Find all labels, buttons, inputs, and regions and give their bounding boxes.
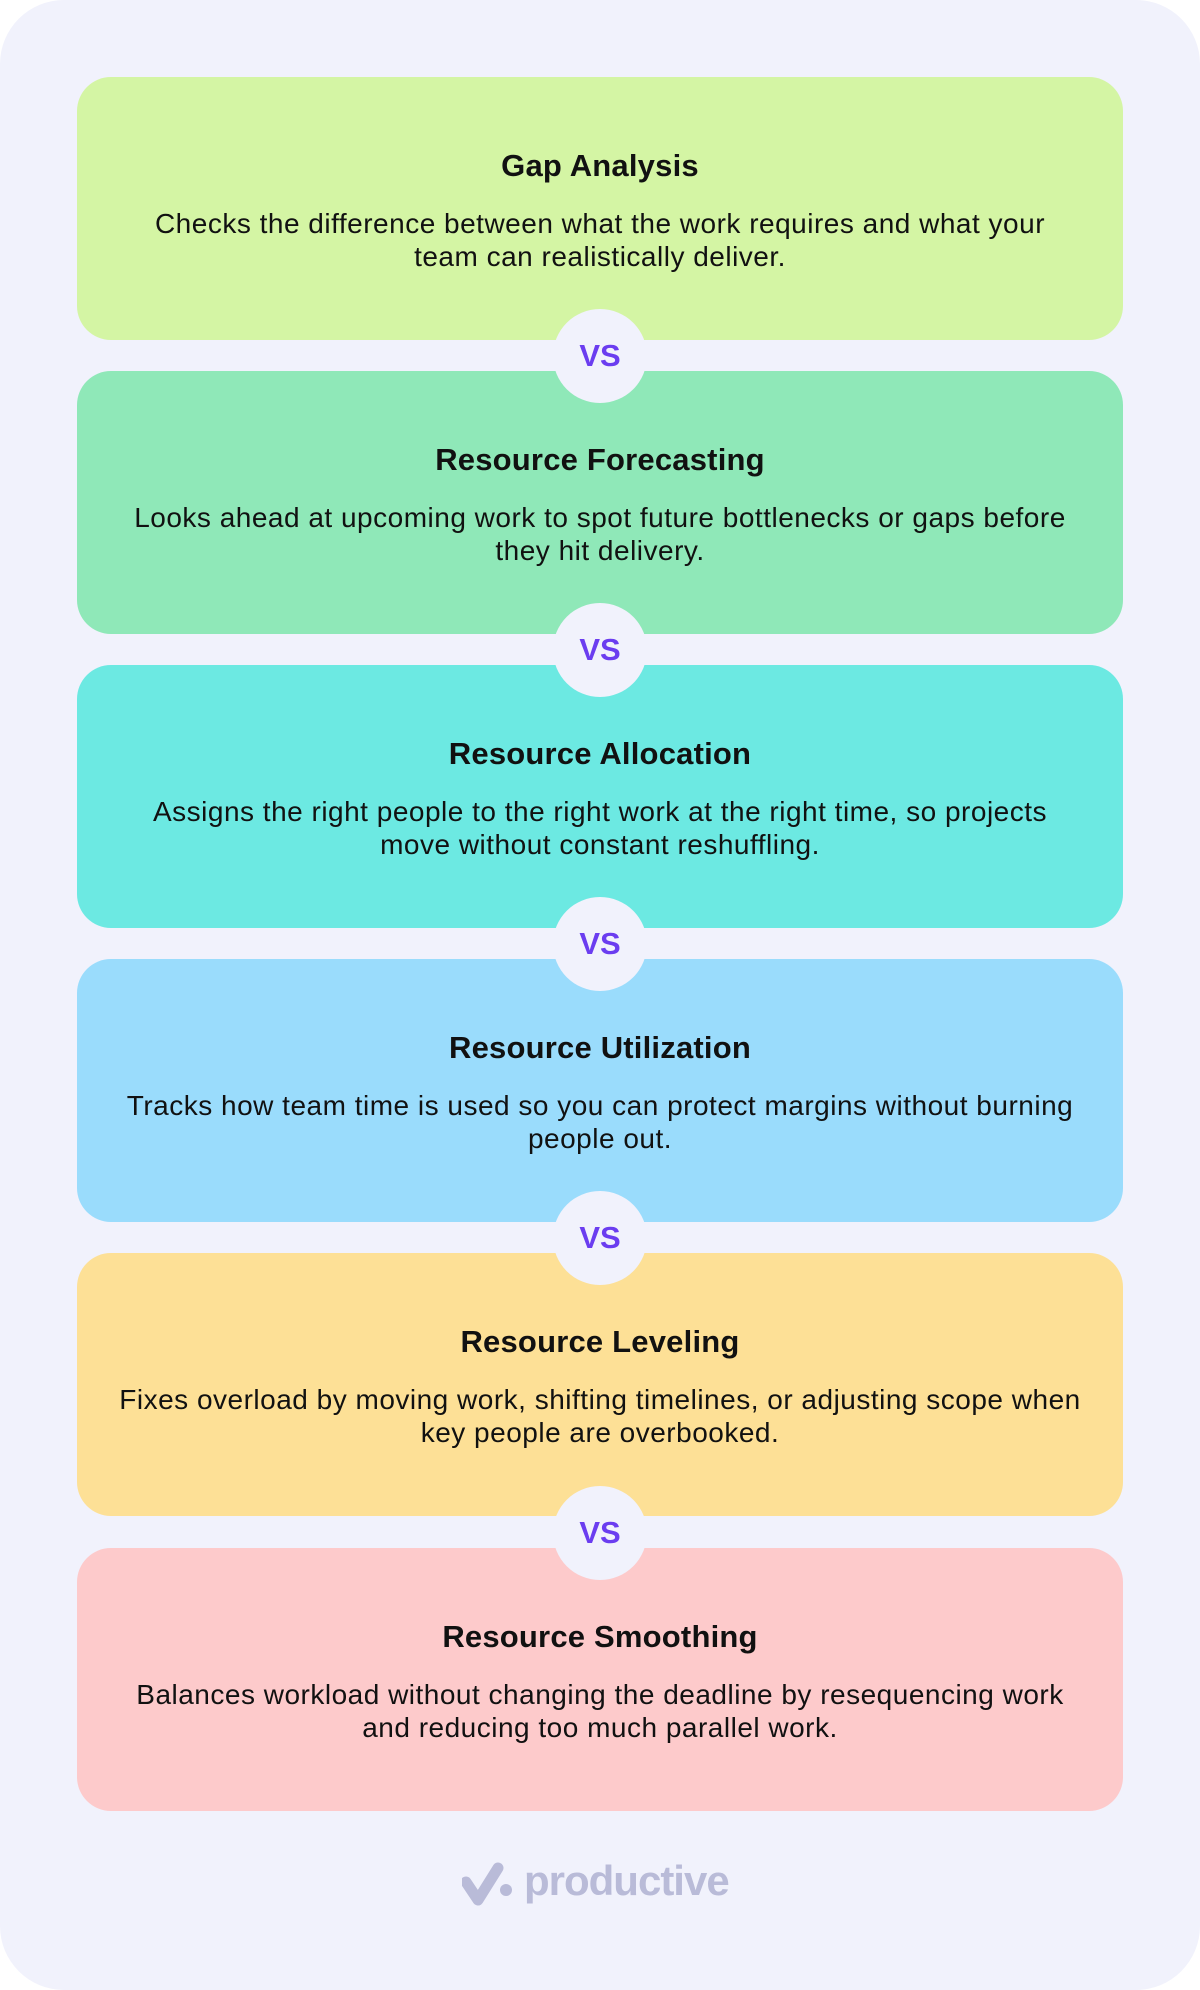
logo text: productive: [524, 1857, 729, 1904]
card: resource smoothing: [77, 1548, 1123, 1811]
card: gap analysis: team can realistically deliver.: [414, 241, 786, 272]
vs badge 3: VS: [579, 926, 621, 961]
card: resource allocation: move without constant reshuffling.: [380, 829, 820, 860]
vs badge 3: [553, 897, 647, 991]
vs badge 1: [553, 309, 647, 403]
card: resource utilization: Resource Utilization: [449, 1030, 751, 1065]
vs badge 4: VS: [579, 1220, 621, 1255]
card: resource allocation: [77, 665, 1123, 928]
vs badge 5: VS: [579, 1515, 621, 1550]
vs badge 1: VS: [579, 338, 621, 373]
icon: check mark: [462, 1862, 512, 1906]
card: resource allocation: Assigns the right people to the right work at the right time, so projects: [153, 796, 1047, 827]
logo: productive: [462, 1857, 729, 1906]
vs badge 2: VS: [579, 632, 621, 667]
card: resource utilization: people out.: [528, 1123, 672, 1154]
card: resource allocation: Resource Allocation: [449, 736, 751, 771]
card: gap analysis: Checks the difference between what the work requires and what your: [155, 208, 1045, 239]
card: resource smoothing: Balances workload without changing the deadline by resequencing work: [136, 1679, 1064, 1710]
card: resource forecasting: Looks ahead at upcoming work to spot future bottlenecks or gaps before: [134, 502, 1066, 533]
card: resource leveling: Fixes overload by moving work, shifting timelines, or adjusting scope when: [119, 1384, 1081, 1415]
card: resource utilization: Tracks how team time is used so you can protect margins without burning: [127, 1090, 1073, 1121]
vs badge 5: [553, 1486, 647, 1580]
card: resource leveling: Resource Leveling: [460, 1324, 740, 1359]
card: resource forecasting: Resource Forecasting: [435, 442, 765, 477]
card: gap analysis: Gap Analysis: [501, 148, 699, 183]
card: resource smoothing: Resource Smoothing: [442, 1619, 758, 1654]
card: resource smoothing: and reducing too much parallel work.: [362, 1712, 838, 1743]
card: resource utilization: [77, 959, 1123, 1222]
card: resource forecasting: they hit delivery.: [495, 535, 705, 566]
card: resource forecasting: [77, 371, 1123, 634]
vs badge 2: [553, 603, 647, 697]
card: resource leveling: [77, 1253, 1123, 1516]
card: gap analysis: [77, 77, 1123, 340]
vs badge 4: [553, 1191, 647, 1285]
card: resource leveling: key people are overbooked.: [421, 1417, 779, 1448]
